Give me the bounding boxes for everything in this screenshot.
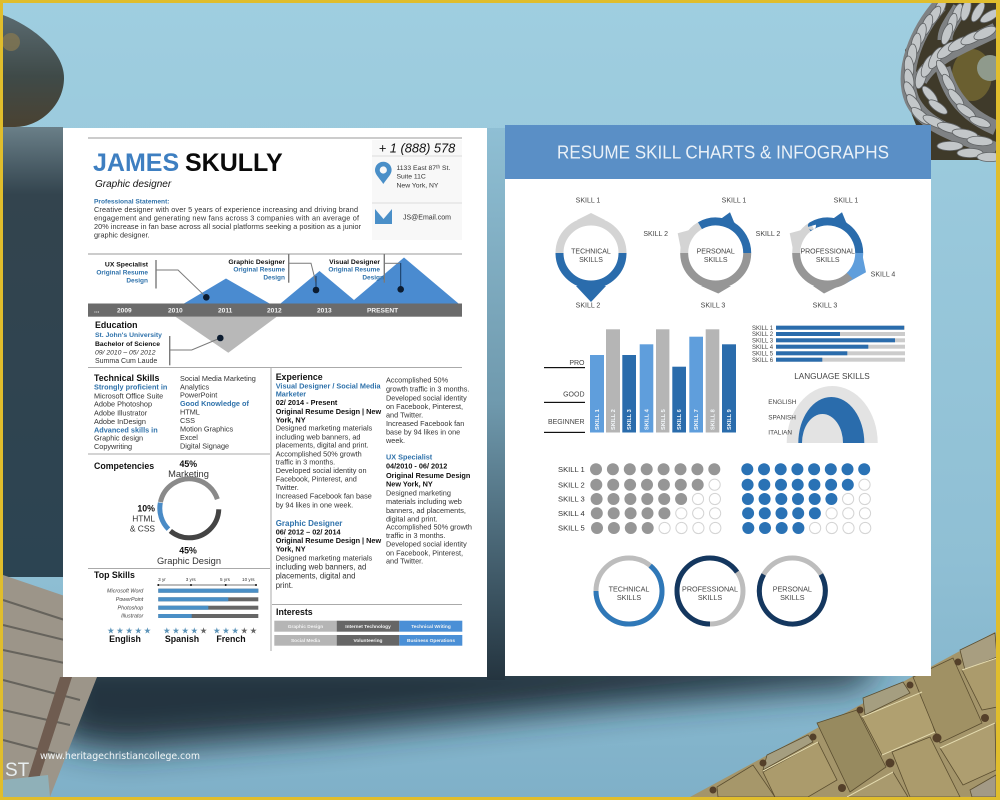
technical skills: Digital Signage [180,441,229,450]
technical skills: Social Media Marketing [180,374,256,383]
label: graphic designer: Original Resume [233,266,285,274]
title: JAMES [93,149,179,177]
chart: technical skills ring: TECHNICAL [571,248,611,256]
chart: vertical skill bars: SKILL 8 [710,409,716,430]
top skills chart: Top Skills [94,570,135,580]
chart: professional skills ring: SKILLS [816,257,840,264]
chart: technical skills ring: SKILLS [579,257,603,264]
technical skills: PowerPoint [180,390,217,399]
experience column 2: traffic in 3 months. [386,531,445,540]
chart: professional skills donut [677,558,743,624]
professional statement: 20% increase in fan base across all social platforms seeking a position as a junior [94,222,362,231]
object: dark bottle top left [2,15,64,577]
experience column 2: Increased Facebook fan [386,419,464,428]
top skills chart [94,570,259,644]
top skills chart: 3 yrs [186,577,196,582]
chart: horizontal skill bars: SKILL 1 [752,326,774,332]
experience column 2: and Twitter. [386,557,423,566]
chart: professional skills ring: SKILL 4 [871,272,895,278]
chart: personal skills donut [747,546,837,636]
icon: location pin [375,162,392,184]
contact card: New York, NY [396,182,439,190]
experience column 1: 06/ 2012 – 02/ 2014 [276,527,342,536]
top skills chart: 3 yr [158,577,166,582]
technical skills: Technical Skills [94,373,159,383]
experience column 1: traffic in 3 months. [276,458,335,467]
top skills chart: PowerPoint [116,597,144,603]
experience column 2: week. [385,436,405,445]
chart: personal skills ring: PERSONAL [697,248,735,256]
timeline band: PRESENT [367,308,398,314]
education text: Summa Cum Laude [95,358,157,365]
top skills chart: Illustrator [121,614,144,620]
object: woven gold mat bottom right [690,632,997,797]
experience column 2: materials including web [386,497,462,506]
label: UX specialist: UX Specialist [105,262,149,268]
watermark: ST [5,760,30,781]
experience column 1: Marketer [276,390,306,399]
label: graphic designer: Graphic Designer [228,259,285,266]
contact card: Suite 11C [396,174,426,180]
chart: language skills: LANGUAGE SKILLS [794,372,870,381]
technical skills: Excel [180,433,198,442]
experience column 1: Twitter. [276,483,299,492]
technical skills: Adobe Photoshop [94,400,152,409]
language stars: ★★★★★ [213,626,259,636]
experience column 1: Designed marketing materials [276,554,373,563]
chart: vertical skill bars: SKILL 3 [627,409,633,430]
chart: personal skills donut: SKILLS [780,593,805,602]
interests [274,607,462,646]
chart: personal skills ring: SKILL 2 [756,231,780,238]
chart: horizontal skill bars: SKILL 6 [752,358,774,364]
chart: professional skills donut: SKILLS [698,593,722,602]
interests: Interests [276,607,313,617]
technical skills: HTML [180,407,200,416]
chart: vertical skill bars: SKILL 6 [677,409,683,430]
competencies donut: Competencies [94,461,154,471]
technical skills: Good Knowledge of [180,399,249,408]
timeline band [88,304,462,317]
contact card: + 1 (888) 578 [379,140,456,156]
chart: horizontal skill bars: SKILL 4 [752,345,774,351]
experience column 2: base by 94 likes in one [386,428,460,437]
watermark [5,751,200,781]
experience column 1: Original Resume Design | New [276,407,381,416]
education text: Education [95,320,138,330]
chart: horizontal skill bars [752,326,905,364]
experience column 1 [276,372,382,590]
chart: technical skills ring: SKILL 2 [576,302,600,310]
technical skills: Graphic design [94,434,143,443]
chart: grey dot matrix [558,463,721,534]
experience column 1: including web banners, ad [276,562,366,572]
chart: vertical skill bars: PRO [569,360,585,367]
chart: horizontal skill bars: SKILL 2 [752,332,774,338]
interests: Graphic Design [288,624,323,630]
connectors [156,254,401,365]
experience column 2: Original Resume Design [386,471,470,480]
experience column 1: Experience [276,372,323,382]
education text: 09/ 2010 – 05/ 2012 [95,350,156,356]
label: UX specialist [96,262,149,284]
timeline chart [88,254,462,365]
contact card: JS@Email.com [403,214,451,222]
label: visual designer: Visual Designer [329,259,380,266]
experience column 2: Accomplished 50% growth [386,523,472,532]
competencies donut: HTML [132,513,155,523]
experience column 1: Visual Designer / Social Media [276,381,382,390]
competencies donut: 45% [179,459,197,469]
chart: grey dot matrix: SKILL 3 [558,495,585,504]
language stars [107,626,259,636]
technical skills: CSS [180,416,195,425]
experience column 1: print. [276,581,293,590]
technical skills: Analytics [180,382,210,391]
experience column 1: 02/ 2014 - Present [276,398,338,407]
professional statement: engagement and generating new fans across 3 companies with an average of [94,214,360,222]
experience column 2: and Twitter. [386,411,423,420]
experience column 1: placements, digital and print. [276,441,369,450]
timeline band: 2010 [168,308,183,314]
timeline band: 2013 [317,308,332,314]
experience column 1: including web banners, ad [276,432,360,441]
chart: language skills: ENGLISH [768,399,797,406]
dividers [88,367,462,651]
technical skills: Microsoft Office Suite [94,391,163,400]
chart: technical skills ring [560,198,622,310]
top skills chart: Spanish [165,634,199,644]
experience column 2: Accomplished 50% [386,375,449,384]
top skills chart: English [109,634,141,644]
experience column 2: New York, NY [386,479,433,488]
chart: technical skills ring: SKILL 1 [576,198,600,204]
label: visual designer [328,259,384,282]
title: SKULLY [185,149,283,177]
object: rope knot top right [901,0,1000,162]
chart: horizontal skill bars: SKILL 5 [752,352,774,358]
professional statement: Professional Statement: [94,198,169,206]
competencies donut: & CSS [130,524,155,534]
header band [505,125,931,179]
chart: personal skills ring: SKILL 1 [722,198,746,204]
chart: language skills [768,372,878,443]
chart: grey dot matrix: SKILL 2 [558,480,585,489]
chart: professional skills ring: SKILL 3 [813,302,837,310]
chart: language skills: ITALIAN [768,429,792,436]
donut ring [148,467,231,550]
language stars: ★★★★★ [107,626,153,636]
interests: Internet Technology [345,624,391,630]
chart: technical skills donut: TECHNICAL [609,584,649,594]
competencies donut: 10% [137,504,155,514]
professional statement [94,198,362,240]
technical skills: Advanced skills in [94,425,158,434]
competencies donut: Marketing [168,469,209,479]
chart: personal skills ring: SKILL 2 [643,231,668,238]
technical skills: Adobe InDesign [94,417,146,426]
label: UX specialist: Design [126,278,148,284]
title [93,149,283,177]
chart: personal skills ring: SKILLS [704,257,728,264]
chart: vertical skill bars: SKILL 9 [727,409,733,430]
competencies donut: 45% [179,546,197,556]
chart: technical skills donut [583,545,675,637]
top skills chart: 10 yrs [242,577,255,582]
label: graphic designer: Design [263,274,285,282]
education text: St. John's University [95,332,162,339]
chart: vertical skill bars: SKILL 7 [694,409,700,430]
experience column 1: York, NY [276,544,306,553]
top skills chart: Photoshop [118,606,143,612]
job title: Graphic designer [95,179,172,190]
panel: resume page [63,128,487,677]
education peak [176,317,277,353]
chart: horizontal skill bars: SKILL 3 [752,339,774,345]
gap shadow between pages [487,128,505,680]
chart: blue dot matrix [741,463,871,534]
header band: RESUME SKILL CHARTS & INFOGRAPHS [557,142,889,162]
chart: grey dot matrix: SKILL 5 [558,524,585,533]
chart: professional skills ring [783,198,895,310]
timeline band: ... [94,308,100,314]
interests: Social Media [291,638,320,644]
interests: Business Operations [407,638,455,644]
chart: vertical skill bars: SKILL 2 [611,409,617,430]
experience column 2: UX Specialist [386,453,433,462]
experience column 2 [385,375,472,566]
experience column 2: Developed social identity [386,393,467,402]
chart: personal skills ring [643,198,780,310]
top skills chart: French [216,634,246,644]
chart: professional skills donut: PROFESSIONAL [682,584,738,594]
experience column 2: Designed marketing [386,488,451,497]
label: graphic designer [228,259,285,282]
top skills chart: Microsoft Word [107,588,144,594]
timeline band: 2009 [117,308,132,314]
experience column 1: Developed social identity on [276,466,367,475]
chart: grey dot matrix: SKILL 4 [558,509,585,518]
experience column 1: Accomplished 50% growth [276,449,362,458]
experience column 2: on Facebook, Pinterest, [386,548,463,557]
label: visual designer: Design [362,274,384,282]
experience column 2: digital and print. [386,514,438,523]
object: wooden blinds bottom left [3,575,100,797]
experience column 1: Graphic Designer [276,519,342,528]
experience column 1: placements, digital and [276,572,355,581]
language stars: ★★★★★ [163,626,209,636]
chart: vertical skill bars: SKILL 4 [644,408,650,430]
label: UX specialist: Original Resume [96,269,148,276]
chart: professional skills ring: PROFESSIONAL [800,248,855,256]
technical skills: Strongly proficient in [94,383,167,392]
interests: Technical Writing [411,624,451,630]
contact card: 1133 East 87ᵗʰ St. [396,165,450,172]
experience column 2: banners, ad placements, [386,506,466,515]
markers [203,286,404,341]
chart: language skills: SPANISH [768,414,796,421]
competencies donut [94,459,231,566]
chart: vertical skill bars [544,329,736,433]
professional statement: Creative designer with over 5 years of experience increasing and driving brand [94,205,358,214]
experience column 1: Original Resume Design | New [276,536,381,545]
experience peaks [184,258,458,304]
experience column 2: growth traffic in 3 months. [386,384,469,393]
competencies donut: Graphic Design [157,556,221,566]
watermark: www.heritagechristiancollege.com [40,751,200,762]
experience column 2: 04/2010 - 06/ 2012 [386,461,447,470]
experience column 1: by 94 likes in one week. [276,500,353,509]
chart: personal skills donut: PERSONAL [773,584,812,594]
chart: technical skills donut: SKILLS [617,593,641,602]
icon: envelope [375,209,392,224]
chart: grey dot matrix: SKILL 1 [558,465,585,474]
professional statement: graphic designer. [94,230,150,240]
chart: personal skills ring: SKILL 3 [701,302,725,310]
technical skills [94,373,256,451]
timeline band: 2011 [218,308,233,314]
top skills chart: 5 yrs [220,577,231,582]
chart: vertical skill bars: SKILL 5 [661,409,667,430]
chart: vertical skill bars: SKILL 1 [595,409,601,430]
experience column 2: on Facebook, Pinterest, [386,402,463,411]
chart: vertical skill bars: GOOD [563,392,584,398]
chart: vertical skill bars: BEGINNER [548,419,584,426]
education text [95,320,162,365]
experience column 1: York, NY [276,415,306,424]
timeline band: 2012 [267,308,282,314]
technical skills: Motion Graphics [180,424,233,433]
technical skills: Copywriting [94,442,132,451]
experience column 1: Increased Facebook fan base [276,492,372,501]
experience column 1: Designed marketing materials [276,424,373,433]
decorative rule top [88,138,462,139]
contact card [372,140,462,240]
experience column 2: Developed social identity [386,540,467,549]
experience column 1: Facebook, Pinterest, and [276,474,357,483]
chart: professional skills ring: SKILL 1 [834,198,858,204]
label: visual designer: Original Resume [328,266,380,274]
technical skills: Adobe Illustrator [94,408,148,417]
panel: skill charts page [505,125,931,676]
interests: Volunteering [354,638,383,644]
education text: Bachelor of Science [95,341,160,348]
